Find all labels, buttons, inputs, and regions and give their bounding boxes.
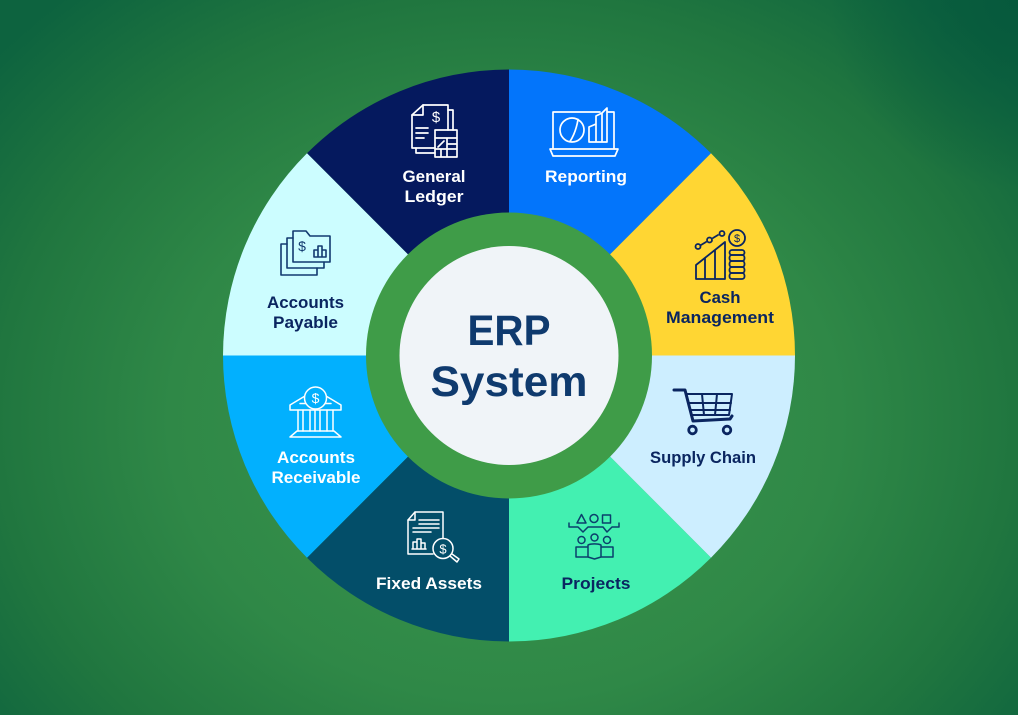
panel: Accounts Payable — [223, 153, 509, 356]
icon: bank building: $ — [312, 390, 320, 406]
icon: stacked folders — [281, 231, 330, 275]
heading: ERP System: ERP — [468, 307, 550, 355]
label: Accounts Receivable — [272, 448, 360, 487]
panel: Projects — [509, 356, 711, 642]
icon: team with shapes — [569, 514, 619, 559]
icon: report with magnifier: $ — [439, 542, 447, 556]
label: Cash Management: Cash — [700, 288, 740, 307]
label: General Ledger: Ledger — [404, 187, 464, 206]
label: Cash Management — [666, 288, 774, 327]
icon: growth bars and coins: $ — [734, 233, 740, 245]
label: Cash Management: Management — [666, 308, 774, 327]
center hub: ERP System — [400, 246, 618, 465]
panel: Supply Chain — [509, 356, 795, 558]
label: Accounts Payable: Accounts — [267, 293, 344, 312]
icon: ledger document and calculator: $ — [432, 109, 441, 126]
icon: report with magnifier — [408, 512, 459, 562]
label: General Ledger — [402, 167, 466, 206]
icon: shopping cart — [674, 390, 732, 434]
icon: ledger document and calculator — [412, 105, 457, 157]
label: Accounts Payable — [267, 293, 344, 332]
panel: Cash Management — [509, 153, 795, 356]
heading: ERP System: System — [430, 358, 588, 406]
label: Supply Chain: Supply Chain — [650, 448, 756, 467]
center ring — [366, 212, 652, 498]
panel: Accounts Receivable — [223, 356, 509, 558]
heading: ERP System — [430, 307, 588, 406]
icon: growth bars and coins — [696, 230, 745, 279]
label: Accounts Receivable: Accounts — [277, 448, 355, 467]
label: Reporting: Reporting — [545, 167, 627, 186]
panel: General Ledger — [307, 70, 509, 356]
label: General Ledger: General — [402, 167, 466, 186]
icon: bank building — [290, 387, 341, 437]
label: Fixed Assets: Fixed Assets — [376, 574, 482, 593]
icon: laptop with charts — [550, 108, 618, 156]
panel: Reporting — [509, 70, 711, 356]
label: Accounts Receivable: Receivable — [272, 468, 360, 487]
label: Accounts Payable: Payable — [273, 313, 338, 332]
label: Projects: Projects — [562, 574, 630, 593]
panel: Fixed Assets — [307, 356, 509, 642]
icon: stacked folders: $ — [298, 238, 306, 254]
